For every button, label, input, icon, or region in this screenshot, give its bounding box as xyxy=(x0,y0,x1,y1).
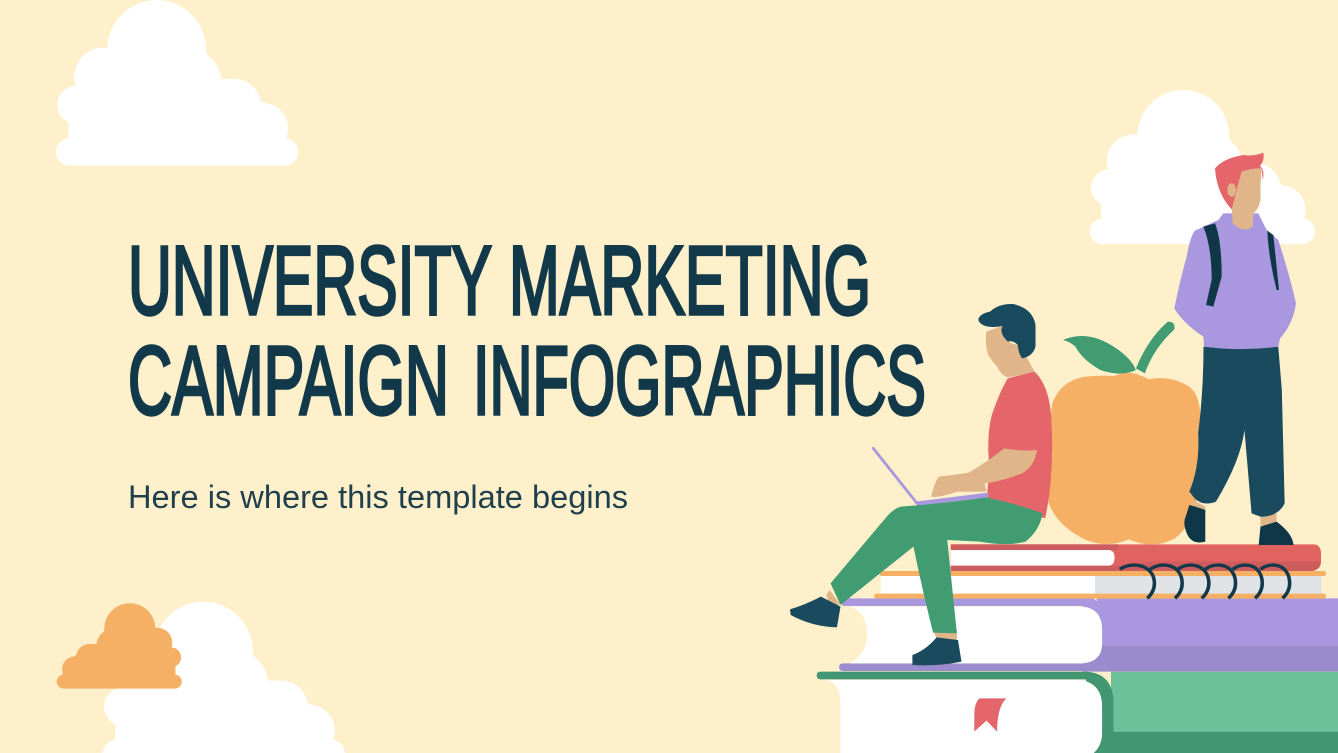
title: INFOGRAPHICS xyxy=(473,326,926,435)
backpack straps xyxy=(1203,223,1279,307)
subtitle: Here is where this template begins xyxy=(128,479,628,515)
book: purple xyxy=(839,598,1338,672)
notebook spiral rings xyxy=(1120,565,1290,598)
book: red xyxy=(951,544,1321,571)
ear xyxy=(1227,183,1236,197)
student: standing upper body xyxy=(1174,153,1296,349)
hair xyxy=(1215,153,1264,209)
face and neck xyxy=(1232,168,1262,229)
cloud: bottom left white xyxy=(103,602,345,753)
cloud: top left xyxy=(56,0,298,166)
title: MARKETING xyxy=(509,226,871,335)
bookmark xyxy=(974,698,1006,732)
student: standing legs xyxy=(1184,347,1294,545)
hoodie xyxy=(1174,213,1296,349)
apple xyxy=(1048,322,1201,544)
student: sitting with laptop xyxy=(790,304,1052,665)
title: CAMPAIGN xyxy=(128,326,449,435)
title xyxy=(128,226,926,435)
cloud: bottom left orange xyxy=(57,603,182,689)
title: UNIVERSITY xyxy=(128,226,492,335)
illustration: books, apple and students xyxy=(790,304,1338,753)
book: green bottom xyxy=(817,672,1338,753)
notebook: orange xyxy=(874,571,1326,599)
cloud: top right xyxy=(1090,90,1315,244)
